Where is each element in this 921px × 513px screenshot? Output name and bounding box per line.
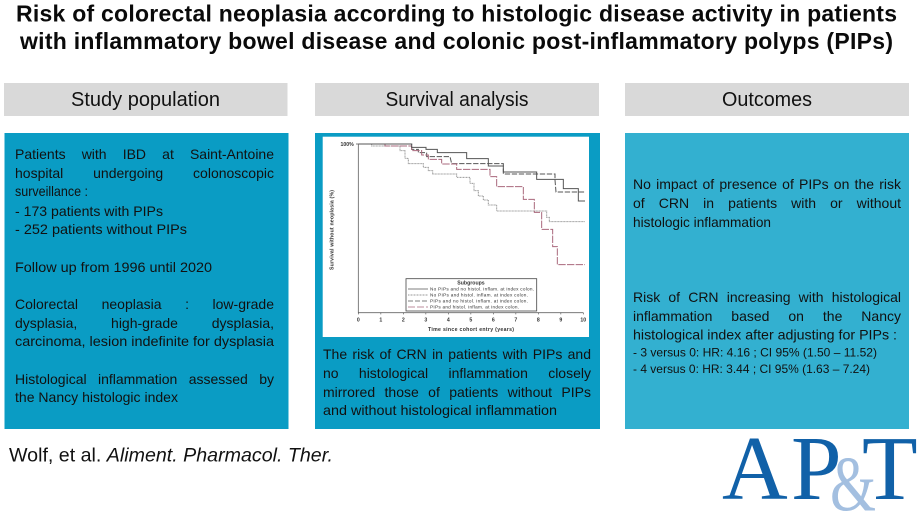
x axis labels: 1	[379, 318, 382, 324]
panel: study population	[4, 133, 288, 429]
x axis labels: Time since cohort entry (years)	[428, 327, 514, 333]
text: patients: Patients with IBD at Saint-Antoine	[15, 146, 274, 162]
y axis labels: 100%	[340, 142, 354, 148]
chart legend: Subgroups	[457, 280, 485, 286]
x axis labels: 0	[357, 318, 360, 324]
text: colorectal neoplasia: carcinoma, lesion indefinite for dysplasia	[15, 333, 274, 349]
chart legend	[406, 279, 537, 311]
text: histological risk: histological index after adjusting for PIPs :	[633, 326, 897, 342]
text: patients: - 173 patients with PIPs	[15, 203, 163, 219]
y axis labels: Survival without neoplasia (%)	[330, 190, 336, 270]
x axis labels: 5	[469, 318, 472, 324]
text: patients	[15, 145, 274, 237]
text: colorectal neoplasia: Colorectal neoplasia : low-grade	[15, 296, 274, 312]
text: survival finding	[323, 345, 591, 418]
text: histological inflammation	[15, 370, 274, 405]
heading: outcomes: Outcomes	[722, 89, 812, 111]
x axis labels: 8	[537, 318, 540, 324]
text: histological risk: inflammation based on the Nancy	[633, 308, 901, 324]
title: with inflammatory bowel disease and colonic post-inflammatory polyps (PIPs)	[19, 28, 893, 54]
curve: no PIPs, histological inflammation	[358, 144, 585, 222]
chart legend: PIPs and no histol. inflam. at index colon.	[430, 298, 528, 304]
text: colorectal neoplasia: dysplasia, high-grade dysplasia,	[15, 315, 274, 331]
text: survival finding: and without histological inflammation	[323, 402, 557, 418]
text: survival finding: mirrored those of patients without PIPs	[323, 384, 591, 400]
text: PIPs impact: of CRN in patients with or without	[633, 195, 901, 211]
text: survival finding: The risk of CRN in patients with PIPs and	[323, 346, 591, 362]
text: histological inflammation: the Nancy histologic index	[15, 389, 178, 405]
heading: outcomes	[625, 83, 909, 116]
heading: survival analysis	[315, 83, 599, 116]
text: histological risk: - 3 versus 0: HR: 4.16 ; CI 95% (1.50 – 11.52)	[633, 346, 877, 360]
x axis labels: 2	[402, 318, 405, 324]
panel: outcomes	[625, 133, 909, 429]
curve: no PIPs, no histological inflammation	[358, 144, 585, 201]
text: histological inflammation: Histological inflammation assessed by	[15, 371, 274, 387]
text: follow up: Follow up from 1996 until 2020	[15, 259, 212, 275]
chart legend: No PIPs and no histol. inflam. at index colon.	[430, 286, 534, 292]
chart legend: No PIPs and histol. inflam. at index colon.	[430, 292, 528, 298]
chart legend: PIPs and histol. inflam. at index colon.	[430, 304, 519, 310]
text: patients: surveillance :	[15, 183, 88, 199]
text: colorectal neoplasia	[15, 295, 274, 349]
curve: PIPs, no histological inflammation	[358, 144, 585, 192]
text: PIPs impact: histologic inflammation	[633, 214, 771, 230]
x axis labels: 10	[580, 318, 586, 324]
x axis labels: 7	[514, 318, 517, 324]
text: histological risk: - 4 versus 0: HR: 3.44 ; CI 95% (1.63 – 7.24)	[633, 362, 870, 376]
heading: survival analysis: Survival analysis	[386, 89, 528, 111]
text: histological risk: Risk of CRN increasing with histological	[633, 288, 901, 304]
text: PIPs impact: No impact of presence of PIPs on the risk	[633, 176, 901, 192]
x axis labels	[357, 318, 586, 333]
text: histological risk	[633, 288, 901, 376]
title: Risk of colorectal neoplasia according to histologic disease activity in patients	[16, 0, 897, 26]
x axis labels: 4	[447, 318, 450, 324]
x axis labels: 3	[424, 318, 427, 324]
x axis labels: 9	[559, 318, 562, 324]
heading: study population: Study population	[71, 89, 220, 111]
panel: survival analysis	[315, 133, 600, 429]
logo: AP&T	[722, 418, 918, 513]
chart: survival curves	[323, 137, 589, 337]
text: patients: hospital undergoing colonoscopic	[15, 164, 274, 180]
x axis labels: 6	[492, 318, 495, 324]
text: PIPs impact	[633, 175, 901, 230]
heading: study population	[4, 83, 288, 116]
title	[16, 0, 897, 54]
curve: PIPs, histological inflammation	[358, 144, 585, 265]
y axis labels	[330, 142, 354, 270]
text: survival finding: no histological inflammation closely	[323, 365, 591, 381]
text: patients: - 252 patients without PIPs	[15, 221, 187, 237]
citation: Wolf, et al. Aliment. Pharmacol. Ther.	[9, 444, 333, 466]
